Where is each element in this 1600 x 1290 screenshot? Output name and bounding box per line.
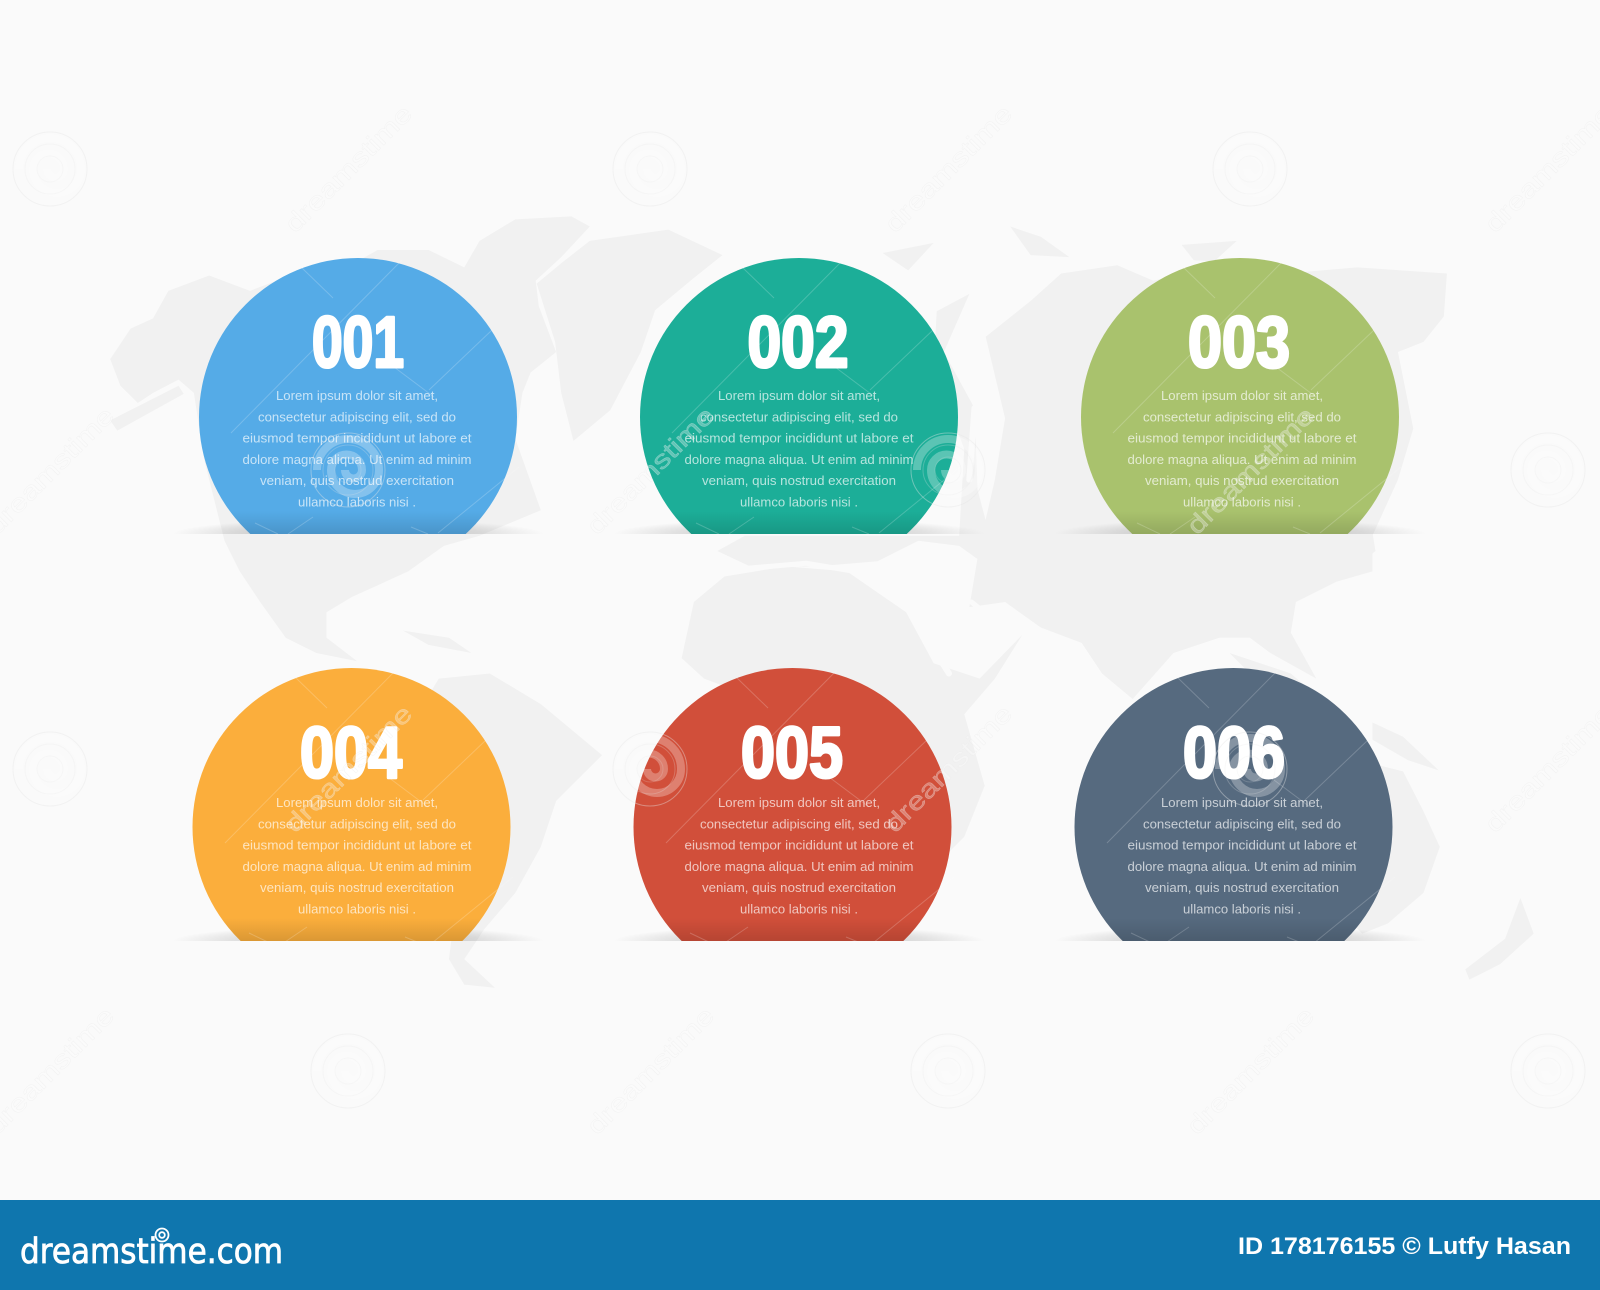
body text 003: consectetur adipiscing elit, sed do — [1143, 409, 1341, 424]
body text 002: Lorem ipsum dolor sit amet, — [718, 388, 880, 403]
footer logo: dreamstime.com — [20, 1232, 283, 1272]
body text 004 — [242, 795, 472, 916]
body text 005: veniam, quis nostrud exercitation — [702, 880, 896, 895]
body text 005: ullamco laboris nisi . — [740, 902, 858, 916]
watermark wordmarks: dreamstime — [1181, 402, 1320, 540]
number 001: 001 — [312, 303, 404, 383]
body text 004: veniam, quis nostrud exercitation — [260, 880, 454, 895]
body text 006: dolore magna aliqua. Ut enim ad minim — [1128, 859, 1356, 874]
watermark wordmarks: dreamstime — [1479, 100, 1600, 238]
body text 006 — [1128, 795, 1357, 916]
circle 002 — [640, 258, 958, 534]
body text 003: eiusmod tempor incididunt ut labore et — [1128, 431, 1357, 446]
world map — [110, 216, 1534, 988]
body text 002: eiusmod tempor incididunt ut labore et — [684, 431, 914, 446]
body text 002: ullamco laboris nisi . — [740, 494, 858, 510]
body text 001: eiusmod tempor incididunt ut labore et — [242, 431, 472, 446]
body text 002 — [684, 388, 914, 510]
watermark wordmarks: dreamstime — [279, 100, 418, 238]
watermark wordmarks: dreamstime — [1479, 700, 1600, 838]
shelf shadow 005 — [634, 932, 964, 941]
body text 001: Lorem ipsum dolor sit amet, — [276, 388, 438, 403]
body text 005 — [684, 795, 914, 916]
body text 003: dolore magna aliqua. Ut enim ad minim — [1128, 452, 1356, 467]
body text 004: ullamco laboris nisi . — [298, 902, 416, 916]
circle shade 006 — [1113, 930, 1354, 941]
body text 005: consectetur adipiscing elit, sed do — [700, 816, 898, 831]
number 002: 002 — [748, 303, 848, 383]
watermark wordmarks: dreamstime — [1181, 1002, 1320, 1140]
body text 006: consectetur adipiscing elit, sed do — [1143, 816, 1341, 831]
footer credit: ID 178176155 © Lutfy Hasan — [1238, 1233, 1571, 1260]
body text 001: ullamco laboris nisi . — [298, 494, 416, 510]
body text 006: ullamco laboris nisi . — [1183, 902, 1301, 916]
circle shade 004 — [226, 924, 477, 941]
number 005: 005 — [741, 714, 843, 794]
watermark wordmarks: dreamstime — [279, 700, 418, 838]
circle 005 — [634, 668, 952, 941]
body text 003: ullamco laboris nisi . — [1183, 494, 1301, 510]
card 002 — [634, 258, 964, 534]
body text 003 — [1128, 388, 1357, 510]
footer bar — [0, 1200, 1600, 1290]
shelf shadow 006 — [1074, 932, 1406, 941]
card 006 — [1074, 668, 1406, 941]
body text 002: veniam, quis nostrud exercitation — [702, 473, 896, 488]
body text 004: Lorem ipsum dolor sit amet, — [276, 795, 438, 810]
body text 001: consectetur adipiscing elit, sed do — [258, 409, 456, 424]
circle shade 001 — [236, 518, 480, 534]
card 005 — [634, 668, 964, 941]
body text 003: veniam, quis nostrud exercitation — [1145, 473, 1339, 488]
circle 001 — [199, 258, 517, 534]
body text 005: dolore magna aliqua. Ut enim ad minim — [684, 859, 914, 874]
watermark lines — [225, 260, 1401, 944]
circle shade 005 — [668, 925, 917, 941]
body text 006: Lorem ipsum dolor sit amet, — [1161, 795, 1323, 810]
shelf shadow 001 — [192, 524, 524, 534]
body text 005: eiusmod tempor incididunt ut labore et — [684, 838, 914, 853]
circle shade 002 — [678, 520, 920, 534]
body text 005: Lorem ipsum dolor sit amet, — [718, 795, 880, 810]
body text 002: consectetur adipiscing elit, sed do — [700, 409, 898, 424]
number 004: 004 — [300, 714, 402, 794]
watermark wordmarks: dreamstime — [879, 100, 1018, 238]
card 001 — [192, 258, 524, 534]
body text 004: consectetur adipiscing elit, sed do — [258, 816, 456, 831]
shelf shadow 003 — [1076, 524, 1406, 534]
circle 003 — [1081, 258, 1399, 534]
card 004 — [192, 668, 524, 941]
card 003 — [1076, 258, 1406, 534]
body text 001 — [242, 388, 472, 510]
body text 006: eiusmod tempor incididunt ut labore et — [1128, 838, 1357, 853]
number 006: 006 — [1183, 714, 1285, 794]
body text 006: veniam, quis nostrud exercitation — [1145, 880, 1339, 895]
circle 006 — [1074, 668, 1392, 941]
shelf shadow 004 — [192, 932, 524, 941]
watermark wordmarks: dreamstime — [581, 402, 720, 540]
circle 004 — [192, 668, 510, 941]
number 003: 003 — [1188, 303, 1290, 383]
circle shade 003 — [1118, 519, 1362, 534]
body text 004: dolore magna aliqua. Ut enim ad minim — [242, 859, 472, 874]
watermark spirals — [13, 132, 1585, 1108]
map gaps — [735, 408, 1012, 673]
body text 003: Lorem ipsum dolor sit amet, — [1161, 388, 1323, 403]
body text 002: dolore magna aliqua. Ut enim ad minim — [684, 452, 914, 467]
watermark wordmarks: dreamstime — [581, 1002, 720, 1140]
watermark wordmarks: dreamstime — [879, 700, 1018, 838]
shelf shadow 002 — [634, 524, 964, 534]
body text 001: dolore magna aliqua. Ut enim ad minim — [242, 452, 472, 467]
body text 004: eiusmod tempor incididunt ut labore et — [242, 838, 472, 853]
body text 001: veniam, quis nostrud exercitation — [260, 473, 454, 488]
